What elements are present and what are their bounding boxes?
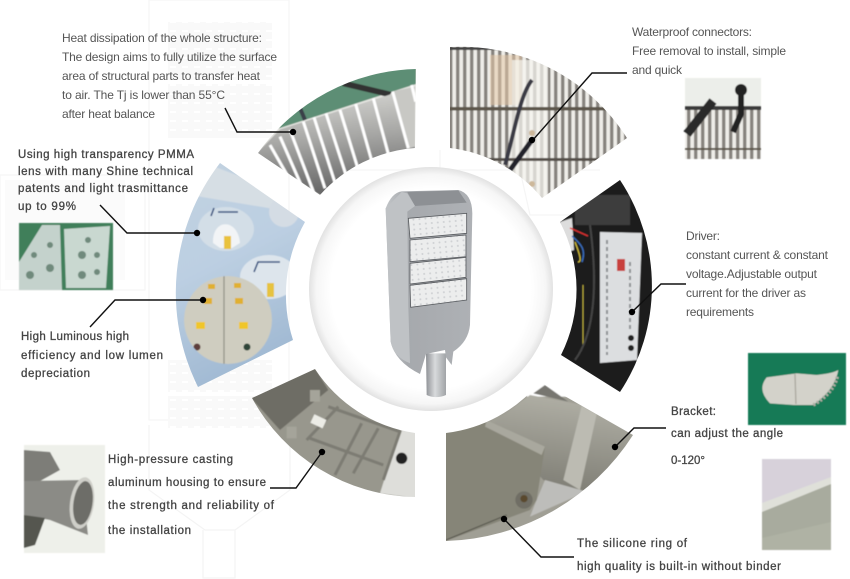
inset photo: PMMA lens	[19, 223, 113, 290]
panel: driver sector	[560, 180, 652, 392]
text: heat dissipation: The design aims to fully utilize the surface	[62, 50, 277, 64]
leader lines and dots	[90, 73, 686, 557]
text: waterproof connectors: Waterproof connectors:	[632, 25, 752, 39]
text: driver: current for the driver as	[686, 286, 806, 300]
panel: waterproof connector sector	[450, 46, 627, 198]
text: PMMA lens: lens with many Shine technical	[18, 166, 193, 178]
text: heat dissipation: to air. The Tj is lower than 55°C	[62, 88, 225, 102]
text: bracket: can adjust the angle	[671, 428, 783, 440]
LED board	[184, 272, 272, 365]
cables	[505, 80, 532, 165]
text: PMMA lens: Using high transparency PMMA	[18, 149, 194, 161]
text: bracket	[671, 406, 783, 467]
text: casting housing: High-pressure casting	[108, 454, 233, 466]
text: heat dissipation	[62, 31, 277, 121]
text: heat dissipation: Heat dissipation of the whole structure:	[62, 31, 262, 45]
text: silicone ring: high quality is built-in without binder	[577, 561, 781, 573]
text: driver: Driver:	[686, 229, 720, 243]
background: faint lamp line drawing	[0, 0, 600, 578]
driver box	[600, 232, 642, 363]
text: waterproof connectors: Free removal to install, simple	[632, 44, 786, 58]
inset photo: connectors	[685, 78, 761, 159]
panel: heat sink sector	[258, 69, 416, 195]
text: PMMA lens: patents and light trasmittance	[18, 183, 188, 195]
lens top	[198, 207, 254, 251]
text: heat dissipation: area of structural parts to transfer heat	[62, 69, 261, 83]
text: casting housing: the strength and reliability of	[108, 500, 275, 512]
text: waterproof connectors: and quick	[632, 63, 683, 77]
text: bracket: 0-120°	[671, 455, 705, 467]
panel: lens and LED sector	[176, 163, 305, 387]
text: driver	[686, 229, 829, 319]
text: high luminous: depreciation	[21, 368, 90, 380]
panel: aluminum housing sector	[252, 369, 415, 497]
inset photo: bracket on green	[748, 353, 846, 425]
text: high luminous: High Luminous high	[21, 331, 129, 343]
text: high luminous: efficiency and low lumen	[21, 350, 163, 362]
green backdrop	[278, 69, 416, 129]
icon: street lamp	[386, 190, 472, 397]
text: driver: requirements	[686, 305, 754, 319]
text: casting housing	[108, 454, 275, 537]
text: waterproof connectors	[632, 25, 786, 77]
text: casting housing: the installation	[108, 525, 191, 537]
text: casting housing: aluminum housing to ensure	[108, 477, 266, 489]
text: driver: voltage.Adjustable output	[686, 267, 818, 281]
inset photo: casting housing	[24, 445, 105, 553]
aluminium fins	[257, 85, 416, 195]
text: silicone ring	[577, 538, 781, 573]
text: bracket: Bracket:	[671, 406, 716, 418]
text: driver: constant current & constant	[686, 248, 829, 262]
central disc with lamp	[309, 167, 553, 411]
text: heat dissipation: after heat balance	[62, 107, 155, 121]
text: silicone ring: The silicone ring of	[577, 538, 688, 550]
panel: bracket sector	[446, 384, 633, 541]
lens lower	[240, 254, 290, 300]
text: high luminous	[21, 331, 163, 380]
inset photo: silicone ring	[762, 459, 831, 550]
text: PMMA lens: up to 99%	[18, 201, 76, 213]
text: PMMA lens	[18, 149, 194, 213]
